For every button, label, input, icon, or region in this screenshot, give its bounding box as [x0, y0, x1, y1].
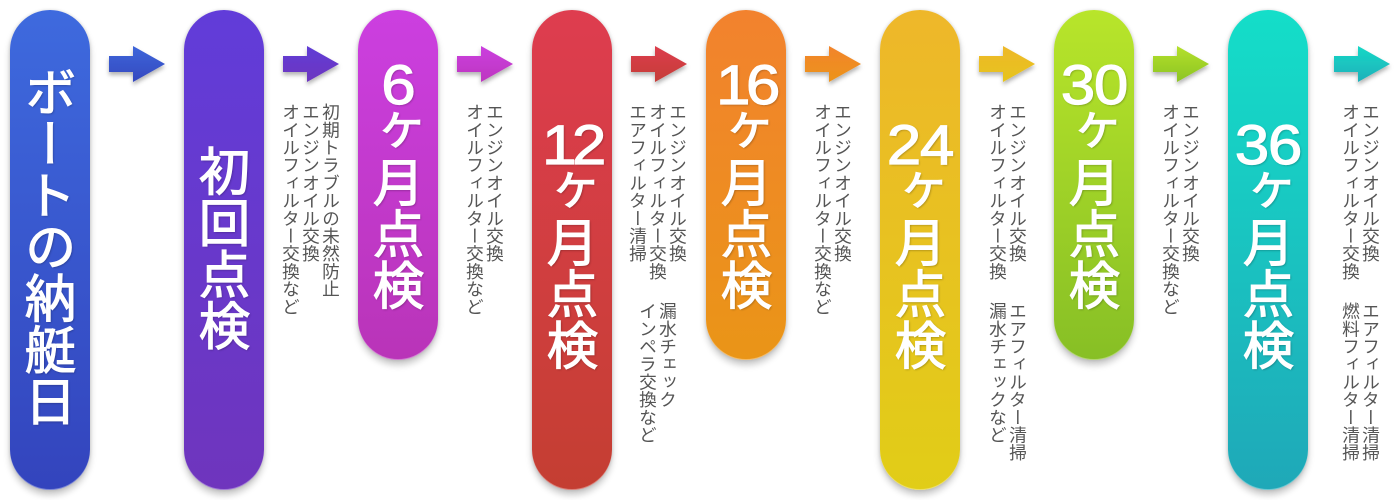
- text: 6ヶ月点検の内容: [462, 103, 508, 315]
- text: 12ヶ月点検の内容2: 漏水チェック: [655, 302, 681, 408]
- heading: 24ヶ月点検: [883, 113, 958, 371]
- text: 36ヶ月点検の内容2: [1338, 302, 1384, 461]
- heading: 36ヶ月点検: 月点検: [1231, 216, 1306, 370]
- heading: 16ヶ月点検: [709, 53, 784, 311]
- heading: 24ヶ月点検: 月点検: [883, 216, 958, 370]
- heading: 30ヶ月点検: ヶ: [1073, 86, 1123, 158]
- text: 24ヶ月点検の内容2: 漏水チェックなど: [985, 302, 1011, 444]
- text: 12ヶ月点検の内容1: オイルフィルター交換: [645, 103, 671, 280]
- heading: 24ヶ月点検: 24: [887, 113, 953, 176]
- arrow 8: [1332, 46, 1390, 86]
- text: 12ヶ月点検の内容1: [625, 103, 691, 280]
- heading: 6ヶ月点検: ヶ: [377, 86, 427, 158]
- heading: 初回点検: 初回点検: [187, 145, 262, 351]
- pill: 30ヶ月点検: [1054, 10, 1134, 360]
- heading: 16ヶ月点検: ヶ: [725, 86, 775, 158]
- arrow 3: [454, 46, 514, 86]
- heading: 16ヶ月点検: 16: [716, 53, 776, 116]
- text: 16ヶ月点検の内容: エンジンオイル交換: [830, 103, 856, 262]
- heading: 36ヶ月点検: ヶ: [1247, 146, 1297, 218]
- heading: 6ヶ月点検: [361, 53, 436, 311]
- heading: 12ヶ月点検: [535, 113, 610, 371]
- text: 16ヶ月点検の内容: オイルフィルター交換など: [810, 103, 836, 315]
- text: 6ヶ月点検の内容: オイルフィルター交換など: [462, 103, 488, 315]
- pill: 16ヶ月点検: [706, 10, 786, 360]
- pill: 36ヶ月点検: [1228, 10, 1308, 490]
- pill: 初回点検: [184, 10, 264, 490]
- heading: 30ヶ月点検: 30: [1061, 53, 1127, 116]
- pill: ボートの納艇日: [10, 10, 90, 490]
- text: 6ヶ月点検の内容: エンジンオイル交換: [482, 103, 508, 262]
- text: 36ヶ月点検の内容1: オイルフィルター交換: [1338, 103, 1364, 280]
- text: 36ヶ月点検の内容1: エンジンオイル交換: [1358, 103, 1384, 262]
- text: 36ヶ月点検の内容2: エアフィルター清掃: [1358, 302, 1384, 461]
- text: 初回点検の内容: エンジンオイル交換: [298, 103, 324, 262]
- text: 24ヶ月点検の内容2: エアフィルター清掃: [1005, 302, 1031, 461]
- text: 初回点検の内容: 初期トラブルの未然防止: [318, 103, 344, 298]
- arrow 6: [976, 46, 1036, 86]
- heading: 36ヶ月点検: [1231, 113, 1306, 371]
- heading: 12ヶ月点検: 月点検: [535, 216, 610, 370]
- text: 30ヶ月点検の内容: [1158, 103, 1204, 315]
- text: 12ヶ月点検の内容2: インペラ交換など: [635, 302, 661, 444]
- arrow 7: [1150, 46, 1210, 86]
- text: 12ヶ月点検の内容1: エンジンオイル交換: [665, 103, 691, 262]
- pill: 6ヶ月点検: [358, 10, 438, 360]
- pill: 24ヶ月点検: [880, 10, 960, 490]
- text: 初回点検の内容: [278, 103, 344, 315]
- text: 初回点検の内容: オイルフィルター交換など: [278, 103, 304, 315]
- heading: 36ヶ月点検: 36: [1235, 113, 1301, 176]
- arrow 1: [106, 46, 166, 86]
- arrow 2: [280, 46, 340, 86]
- heading: 16ヶ月点検: 月点検: [709, 156, 784, 310]
- text: 16ヶ月点検の内容: [810, 103, 856, 315]
- text: 24ヶ月点検の内容2: [985, 302, 1031, 461]
- arrow 5: [802, 46, 862, 86]
- text: 12ヶ月点検の内容1: エアフィルター清掃: [625, 103, 651, 262]
- heading: 12ヶ月点検: ヶ: [551, 146, 601, 218]
- text: 30ヶ月点検の内容: オイルフィルター交換など: [1158, 103, 1184, 315]
- heading: 6ヶ月点検: 月点検: [361, 156, 436, 310]
- text: 36ヶ月点検の内容2: 燃料フィルター清掃: [1338, 302, 1364, 461]
- heading: 24ヶ月点検: ヶ: [899, 146, 949, 218]
- text: 24ヶ月点検の内容1: [985, 103, 1031, 280]
- text: 24ヶ月点検の内容1: エンジンオイル交換: [1005, 103, 1031, 262]
- text: 36ヶ月点検の内容1: [1338, 103, 1384, 280]
- pill: 12ヶ月点検: [532, 10, 612, 490]
- text: 12ヶ月点検の内容2: [635, 302, 681, 444]
- heading: 6ヶ月点検: 6: [381, 53, 415, 116]
- heading: 30ヶ月点検: 月点検: [1057, 156, 1132, 310]
- heading: 12ヶ月点検: 12: [542, 113, 602, 176]
- text: 30ヶ月点検の内容: エンジンオイル交換: [1178, 103, 1204, 262]
- heading: 30ヶ月点検: [1057, 53, 1132, 311]
- heading: ボートの納艇日: ボートの納艇日: [13, 66, 88, 426]
- arrow 4: [628, 46, 688, 86]
- text: 24ヶ月点検の内容1: オイルフィルター交換: [985, 103, 1011, 280]
